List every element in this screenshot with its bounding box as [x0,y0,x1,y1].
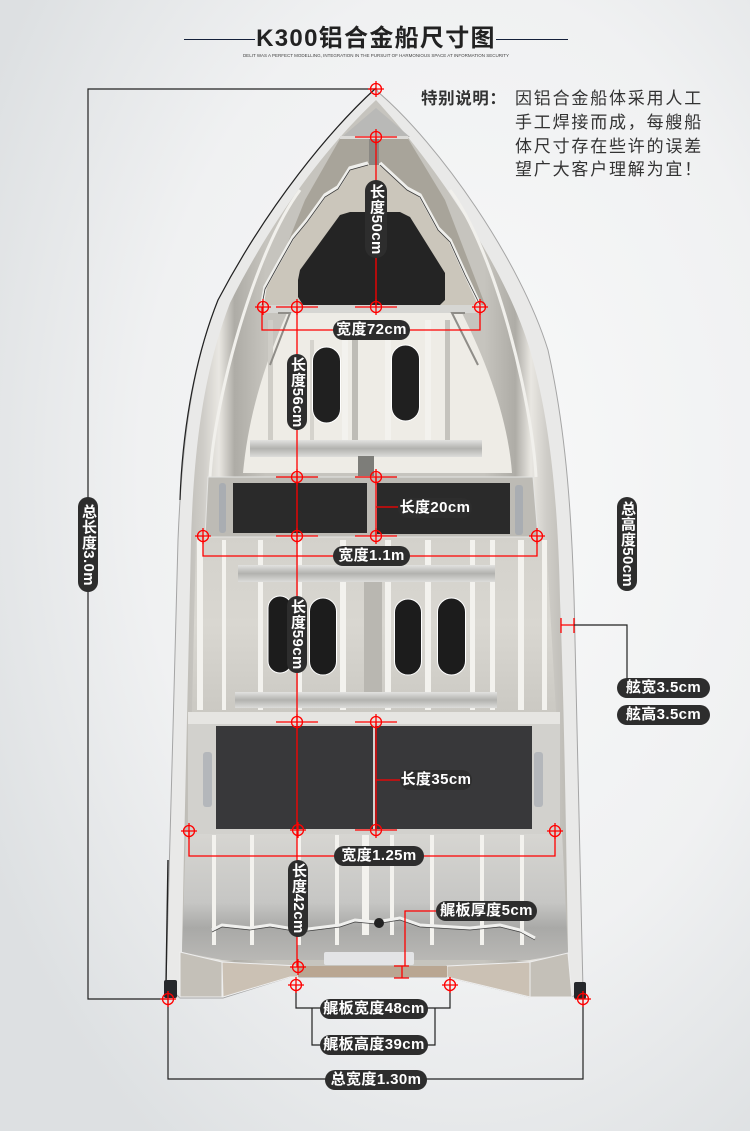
label: total length: 总长度3.0m [80,504,97,586]
label: bow length: 长度50cm [368,184,385,254]
label: length 42cm: 长度42cm [290,863,307,934]
label: gunwale height [617,705,710,725]
label: gunwale width: 舷宽3.5cm [626,679,701,696]
upper oval hatches [312,345,420,423]
front deck mat [298,212,445,305]
label: transom height: 艉板高度39cm [323,1036,425,1053]
weld seam [212,918,535,938]
upper floor [243,313,512,473]
cross bars [238,565,495,582]
aft floor [182,832,568,960]
label: length 59cm: 长度59cm [289,599,306,670]
middle seat [205,477,538,537]
title: K300铝合金船尺寸图 [256,25,496,52]
title rules [184,38,568,40]
rear seat [188,712,560,834]
side strake highlights [210,190,536,477]
label: length 35cm: 长度35cm [401,771,471,788]
floor ribs [197,320,547,945]
label: transom thickness: 艉板厚度5cm [440,902,533,919]
special note text: 体尺寸存在些许的误差 [515,137,703,156]
label: length 20cm: 长度20cm [400,499,470,516]
special note text: 手工焊接而成，每艘船 [515,113,703,132]
lower oval hatches [268,596,466,675]
stern brackets [164,980,177,998]
label: total width: 总宽度1.30m [331,1071,421,1088]
special note text: 望广大客户理解为宜！ [515,160,703,179]
boat hull [164,88,586,999]
lower floor [192,537,556,712]
special note text: 因铝合金船体采用人工 [515,89,703,108]
label: middle width: 宽度1.1m [338,547,405,564]
special note text [515,89,703,179]
front deck [262,137,486,307]
label: rear width: 宽度1.25m [341,847,417,864]
special note heading: 特别说明： [421,90,506,108]
label: front width: 宽度72cm [336,321,407,338]
transom [180,952,222,997]
label: transom width: 艉板宽度48cm [323,1000,425,1017]
label: gunwale height: 舷高3.5cm [626,706,701,723]
bow checker plate [342,108,410,137]
subtitle: DELIT WAS A PERFECT MODELLING, INTEGRATION IN THE PURSUIT OF HARMONIOUS SPACE AT INFORMATION SECURITY [243,53,509,58]
label: total height: 总高度50cm [619,501,636,587]
label: gunwale width [617,678,710,698]
label: length 56cm: 长度56cm [289,357,306,427]
cross bar upper [250,440,482,457]
